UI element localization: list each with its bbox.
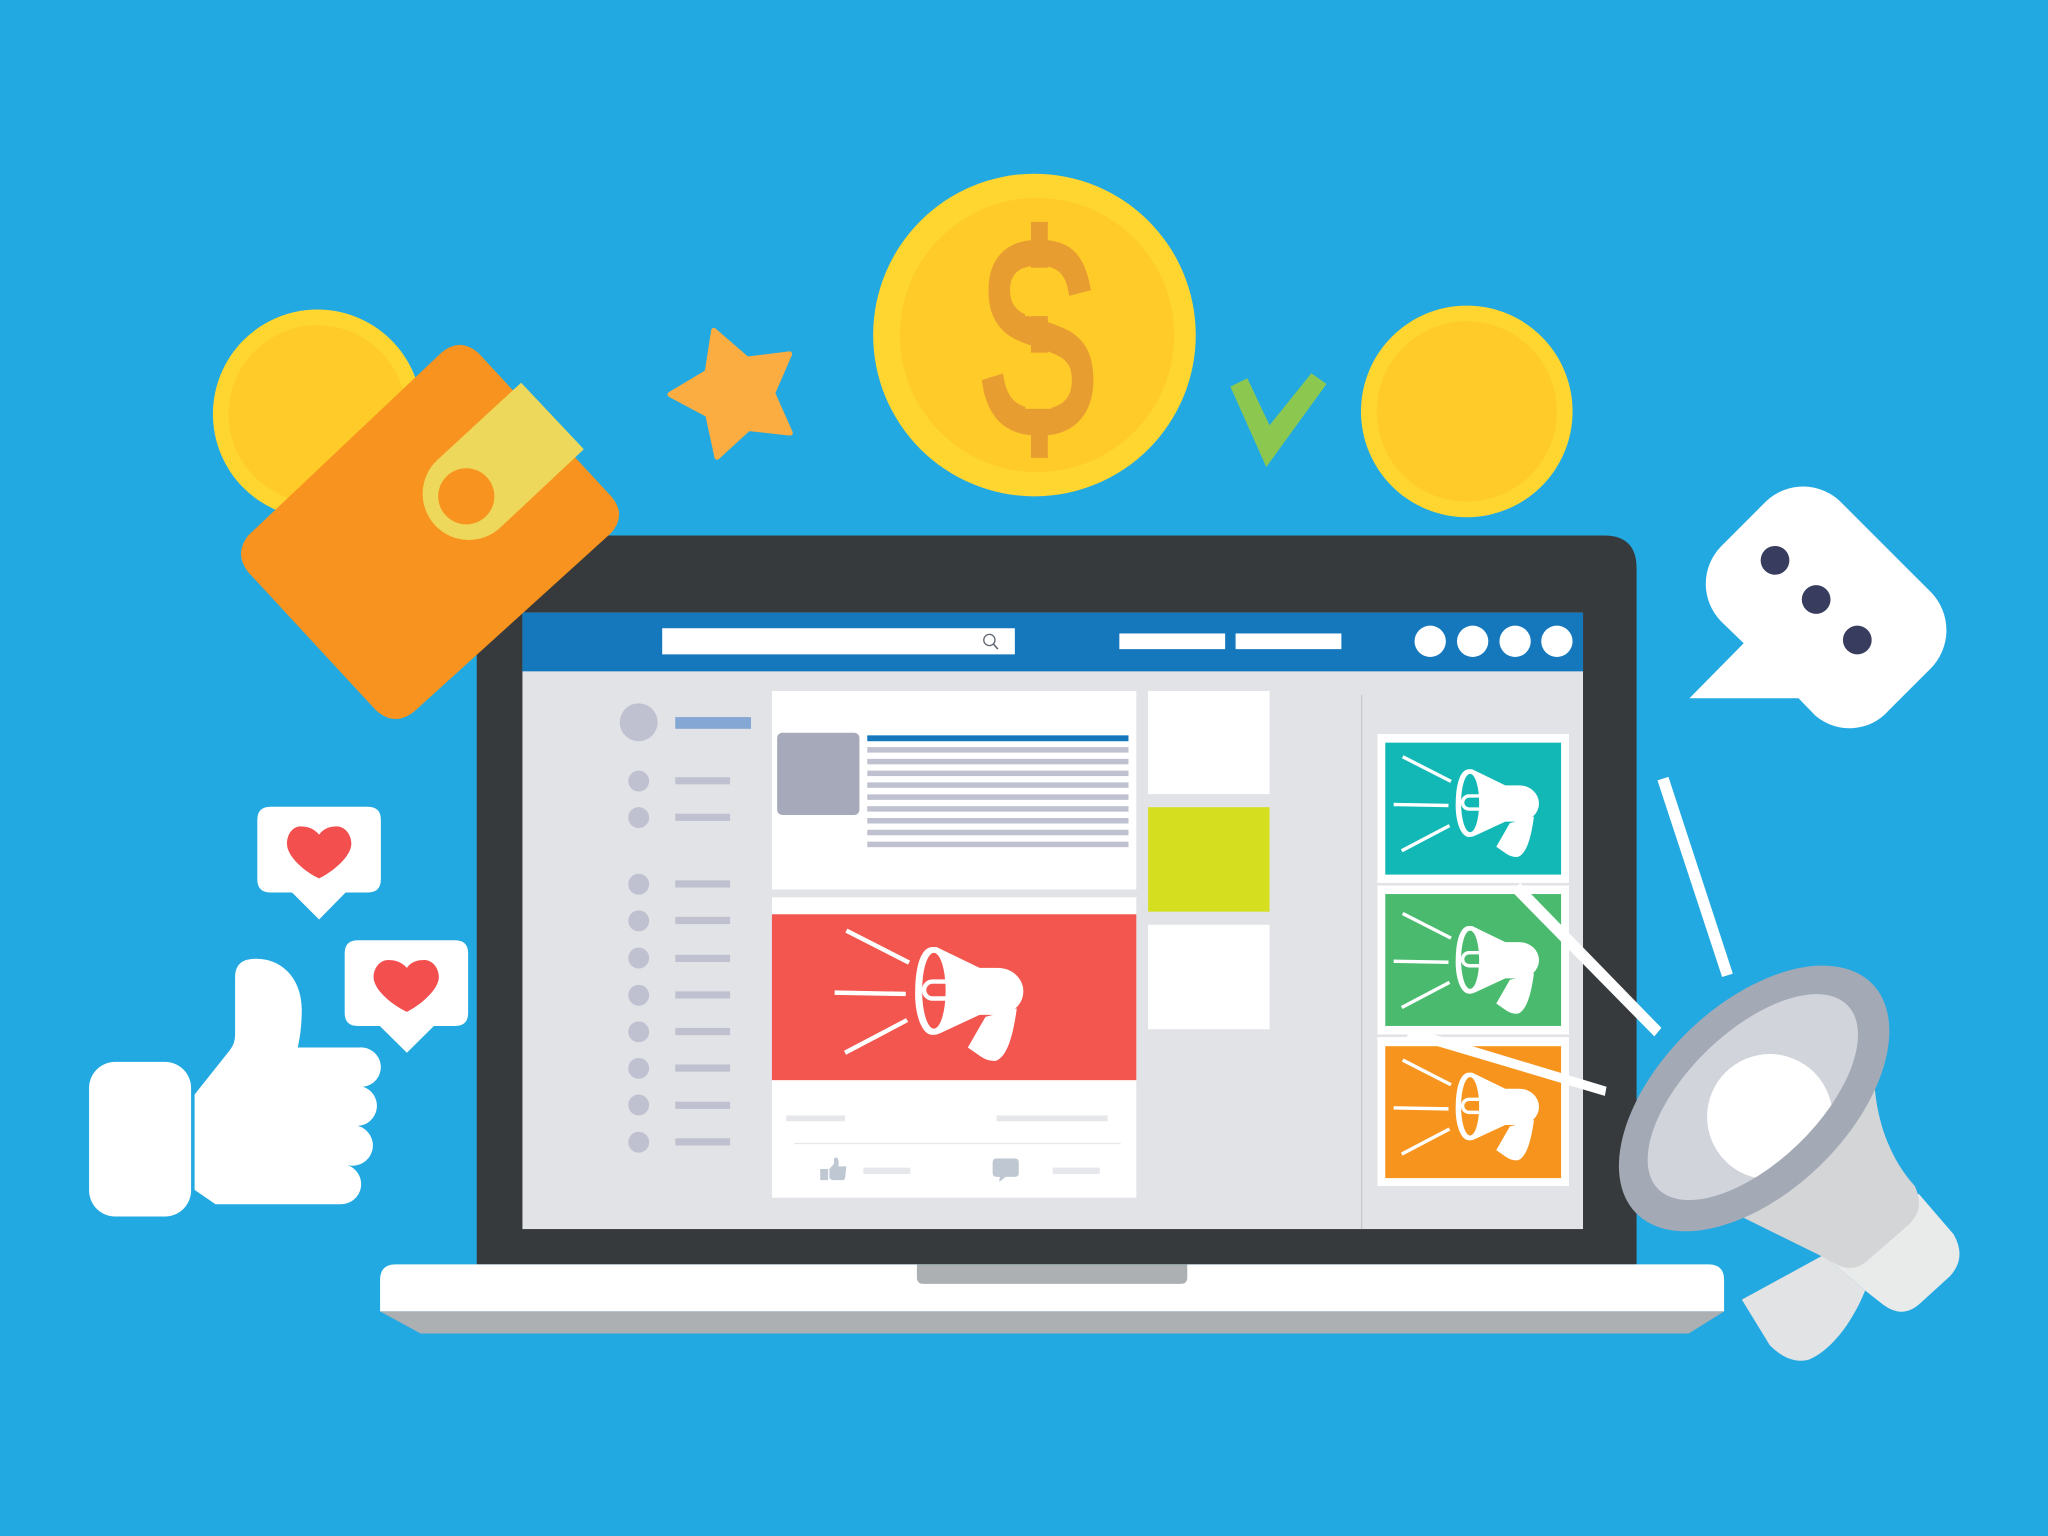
icon: small comment bubble: [993, 1159, 1019, 1182]
laptop frame: [477, 536, 1637, 1264]
icon: small thumbs up: [820, 1157, 846, 1180]
large megaphone: [1618, 966, 1960, 1361]
coin: right: [1361, 306, 1573, 517]
horn rim: [1570, 916, 1938, 1280]
coin: left, behind wallet: [213, 310, 422, 519]
browser header bar: [522, 613, 1583, 671]
handle: [1742, 1255, 1865, 1361]
horn body: [1724, 1058, 1919, 1268]
heart bubble: top: [257, 807, 381, 920]
sound ray: middle: [1511, 883, 1661, 1036]
wallet: [241, 345, 619, 719]
right column tiles: [1148, 691, 1270, 1029]
sound ray: lower: [1407, 1028, 1607, 1096]
icon: thumbs up: [89, 959, 381, 1217]
illustration: social media advertising: [89, 174, 1960, 1361]
laptop: [380, 536, 1724, 1334]
ad card: teal: [1377, 734, 1569, 883]
check mark: [1230, 373, 1326, 467]
coin: large with dollar sign: [873, 174, 1196, 496]
back cap: [1823, 1194, 1960, 1312]
heart bubble: lower: [345, 940, 468, 1053]
star: [670, 330, 790, 457]
dollar sign: $: [982, 179, 1094, 496]
horn inner highlight: [1707, 1054, 1832, 1179]
screen: [522, 613, 1583, 1229]
left sidebar menu: [620, 703, 751, 1153]
speech bubble: [1689, 486, 1946, 728]
icon: megaphone on red banner: [835, 931, 1023, 1061]
ad card: orange: [1377, 1037, 1569, 1186]
ad card: green: [1377, 886, 1569, 1034]
ad post card with red banner: [772, 897, 1136, 1198]
horn inside: [1613, 959, 1893, 1236]
text post card: [772, 691, 1136, 889]
laptop base: [380, 1264, 1724, 1334]
sound ray: upper: [1657, 777, 1733, 977]
